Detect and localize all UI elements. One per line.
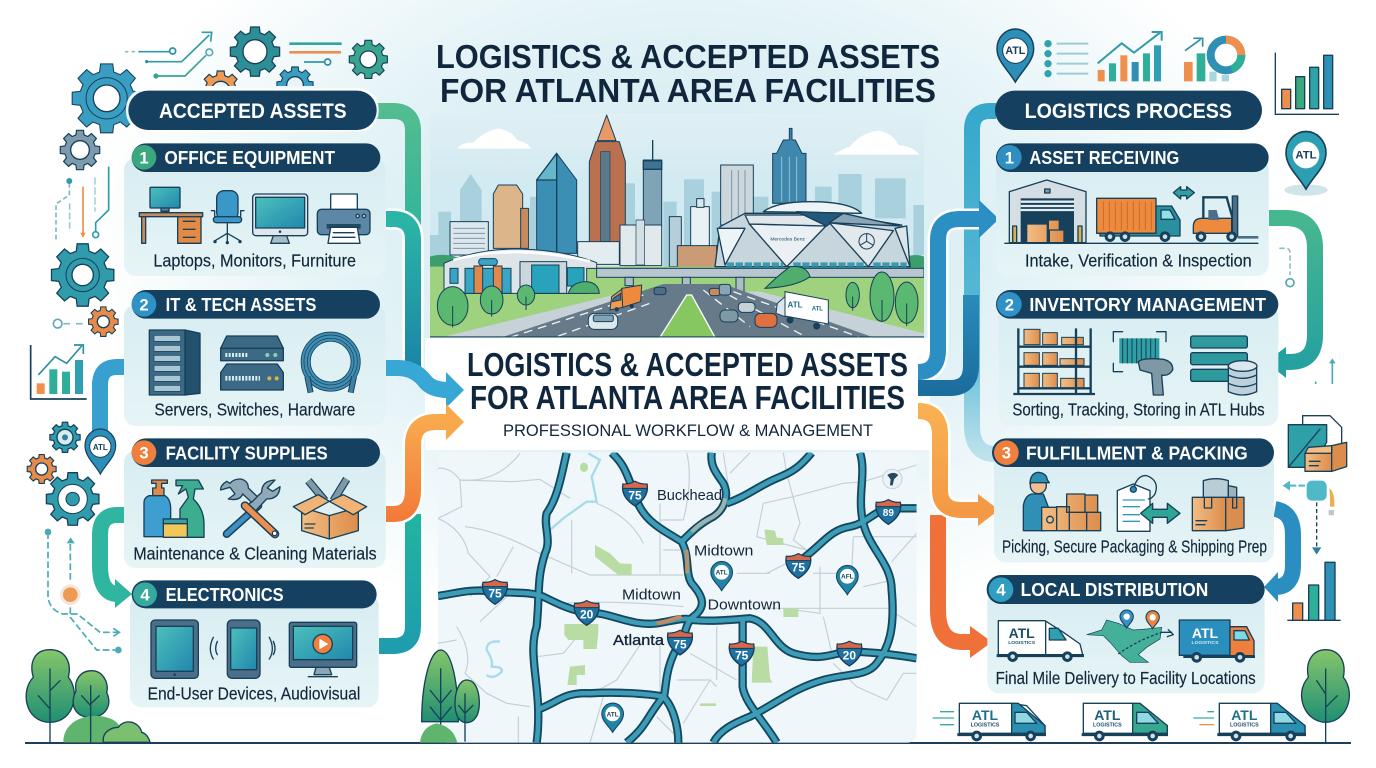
trees: in front of map	[420, 650, 479, 743]
dashed lines right	[1279, 248, 1336, 384]
trees: lower left	[26, 650, 150, 742]
left decorations: gears and circuit lines	[27, 27, 387, 653]
van: middle: LOGISTICS	[1093, 722, 1122, 728]
icon: chair	[211, 191, 244, 244]
map labels	[613, 488, 781, 649]
roads	[438, 453, 917, 743]
clouds	[457, 128, 919, 155]
gear: teal top	[230, 27, 280, 76]
minor streets	[438, 453, 917, 743]
panel: fulfillment and packing: 3	[1002, 444, 1011, 463]
icon: open box with tools	[293, 479, 367, 539]
overpass	[596, 268, 924, 292]
highway shields: 89	[883, 508, 894, 519]
icon: compass	[883, 469, 902, 489]
van: middle	[1082, 703, 1168, 741]
van: left: ATL	[972, 707, 999, 723]
gear: gray	[60, 130, 100, 170]
icon: shipping label	[1117, 476, 1180, 531]
text: distribution caption: Final Mile Delivery to Facility Locations	[996, 668, 1256, 688]
icon: server rack	[149, 330, 200, 395]
panel: accepted assets	[26, 88, 386, 742]
gears and pin: lower left: ATL	[93, 443, 108, 452]
title	[436, 38, 940, 109]
text: inventory caption: Sorting, Tracking, Storing in ATL Hubs	[1012, 400, 1265, 420]
skyline illustration: Mercedes Benz	[770, 236, 805, 242]
map pins	[602, 561, 858, 732]
panel: office equipment: OFFICE EQUIPMENT	[164, 147, 335, 168]
van: right	[1193, 703, 1306, 741]
panel: facility supplies	[124, 438, 386, 568]
text: facility caption: Maintenance & Cleaning Materials	[133, 544, 377, 564]
icon: forklift	[1193, 196, 1258, 242]
map labels: Midtown	[694, 544, 753, 560]
connector arrows: left column	[100, 111, 464, 646]
panel: IT and tech assets: 2	[139, 295, 149, 314]
foreground towers	[450, 115, 806, 267]
icon: desk with monitor	[139, 187, 203, 243]
panel: electronics: ELECTRONICS	[166, 584, 284, 605]
panel: office equipment	[124, 143, 386, 276]
heading: logistics process: LOGISTICS PROCESS	[1025, 100, 1232, 123]
panel: facility supplies: 3	[139, 444, 149, 463]
icon: blue truck	[1179, 620, 1255, 663]
panel: IT and tech assets: IT & TECH ASSETS	[166, 294, 316, 315]
highway shields: 75	[488, 587, 502, 601]
parks	[564, 463, 798, 706]
heading: accepted assets: ACCEPTED ASSETS	[159, 100, 347, 123]
panel: inventory management	[996, 290, 1278, 426]
skyline illustration	[430, 113, 924, 337]
gear: teal left	[51, 244, 114, 306]
icon: blue truck: ATL	[1192, 625, 1219, 641]
icon: shelving	[1013, 328, 1095, 394]
highway shields	[483, 481, 901, 666]
highway shields: 20	[580, 608, 594, 622]
top right icons: pin, list, charts	[997, 29, 1241, 82]
central heading: LOGISTICS & ACCEPTED ASSETS	[467, 346, 908, 383]
van: left	[933, 703, 1046, 741]
chart: left growth	[31, 345, 87, 399]
subtitle: PROFESSIONAL WORKFLOW & MANAGEMENT	[503, 421, 873, 440]
chart: lower right	[1287, 562, 1341, 620]
van: right: ATL	[1231, 707, 1258, 723]
icon: monitor	[253, 194, 308, 243]
panel: local distribution: 4	[996, 581, 1006, 600]
ground and hills	[430, 267, 924, 337]
panel: logistics process	[933, 29, 1349, 743]
icon: white van: LOGISTICS	[1008, 640, 1036, 646]
icon: route map	[1087, 610, 1173, 662]
panel: local distribution: LOCAL DISTRIBUTION	[1021, 579, 1208, 600]
map labels: Atlanta	[613, 633, 665, 649]
gear: large blue	[72, 64, 141, 133]
highway shields: 75	[735, 648, 749, 662]
map labels: Downtown	[708, 597, 781, 613]
tree: lower right	[1302, 650, 1349, 743]
central heading: FOR ATLANTA AREA FACILITIES	[470, 379, 905, 416]
van: left: LOGISTICS	[971, 722, 1000, 728]
heading: accepted assets	[126, 88, 379, 132]
icon: white van	[997, 621, 1084, 662]
rivers	[487, 453, 600, 677]
white band behind central title	[425, 338, 930, 450]
panel: asset receiving	[996, 143, 1269, 276]
title: FOR ATLANTA AREA FACILITIES	[440, 72, 936, 109]
highway shields: 75	[792, 561, 805, 575]
icon: network switches	[221, 336, 283, 390]
icon: ATL pin right: ATL	[1295, 149, 1317, 161]
gear: small orange	[89, 307, 118, 336]
highway	[430, 284, 660, 337]
panel: inventory management: INVENTORY MANAGEMENT	[1029, 294, 1266, 315]
circuit lines: top	[125, 32, 342, 79]
icon: worker with boxes	[1023, 472, 1101, 531]
circuit lines: left	[53, 167, 109, 328]
van: middle: ATL	[1094, 707, 1121, 723]
top right icons: pin, list, charts: ATL	[1005, 45, 1026, 57]
title: LOGISTICS & ACCEPTED ASSETS	[436, 38, 940, 75]
truck: ATL: ATL	[788, 300, 803, 309]
icon: warehouse	[1009, 180, 1086, 243]
ground line	[25, 742, 1351, 744]
highway shields: 20	[843, 648, 856, 662]
icon: barcode scanner	[1113, 332, 1173, 395]
panel: local distribution	[987, 575, 1265, 693]
right side icons: folders, flow, chart	[933, 416, 1349, 743]
icon: packed box	[1192, 479, 1244, 531]
truck: ATL	[776, 292, 828, 329]
icon: phone and signal	[210, 620, 275, 678]
low office building	[444, 249, 597, 293]
icon: video monitor	[289, 622, 357, 677]
icon: servers and database	[1191, 336, 1257, 395]
map labels: Midtown	[622, 587, 681, 603]
panel: facility supplies: FACILITY SUPPLIES	[166, 442, 328, 463]
bushes and trees	[437, 266, 918, 327]
gears and pin: lower left	[27, 422, 122, 653]
cars	[588, 284, 777, 329]
truck: ATL: ATL	[812, 307, 823, 313]
text: fulfillment caption: Picking, Secure Packaging & Shipping Prep	[1002, 536, 1267, 556]
map pins: ATL	[607, 711, 619, 718]
panel: asset receiving: ASSET RECEIVING	[1029, 147, 1179, 168]
panel: IT and tech assets	[124, 290, 386, 426]
icon: printer	[317, 194, 370, 243]
highway shields: 75	[628, 488, 642, 502]
map pins: AFL	[841, 574, 854, 581]
chart: top right	[1275, 53, 1339, 114]
icon: delivery truck	[1097, 198, 1180, 242]
panel: inventory management: 2	[1005, 295, 1014, 314]
icon: cleaning products	[144, 480, 204, 537]
icon: double arrow	[1173, 187, 1194, 199]
gear: green top right	[349, 40, 387, 78]
icon: tablet	[151, 620, 198, 678]
text: electronics caption: End-User Devices, Audiovisual	[148, 684, 360, 704]
map pins: ATL	[716, 570, 728, 577]
text: IT caption: Servers, Switches, Hardware	[154, 400, 355, 420]
text: asset receiving caption: Intake, Verification & Inspection	[1025, 251, 1252, 271]
icon: ATL pin right	[1284, 132, 1328, 196]
panel: fulfillment and packing	[992, 438, 1274, 562]
icon: flow marker	[1283, 481, 1334, 555]
panel: office equipment: 1	[139, 148, 149, 167]
central heading	[467, 346, 908, 440]
gears: half hidden behind header	[204, 66, 314, 86]
van: right: LOGISTICS	[1230, 722, 1259, 728]
map labels: Buckhead	[657, 488, 722, 504]
road map	[420, 453, 917, 743]
icon: white van: ATL	[1009, 625, 1035, 641]
stadium	[715, 202, 910, 267]
icon: blue truck: LOGISTICS	[1192, 640, 1219, 646]
truck: orange	[610, 285, 642, 311]
panel: asset receiving: 1	[1005, 148, 1014, 167]
text: office equipment caption: Laptops, Monitors, Furniture	[153, 251, 356, 271]
connector arrows: right column	[918, 111, 1315, 658]
highway shields: 75	[673, 637, 687, 651]
background skyline	[430, 174, 924, 268]
panel: fulfillment and packing: FULFILLMENT & PACKING	[1026, 442, 1248, 463]
heading: logistics process	[995, 91, 1262, 130]
icon: cable coil	[304, 335, 357, 393]
panel: electronics	[130, 580, 379, 707]
panel: electronics: 4	[140, 585, 150, 604]
icon: crossed tools	[221, 479, 280, 536]
icon: documents and box	[1288, 416, 1347, 471]
